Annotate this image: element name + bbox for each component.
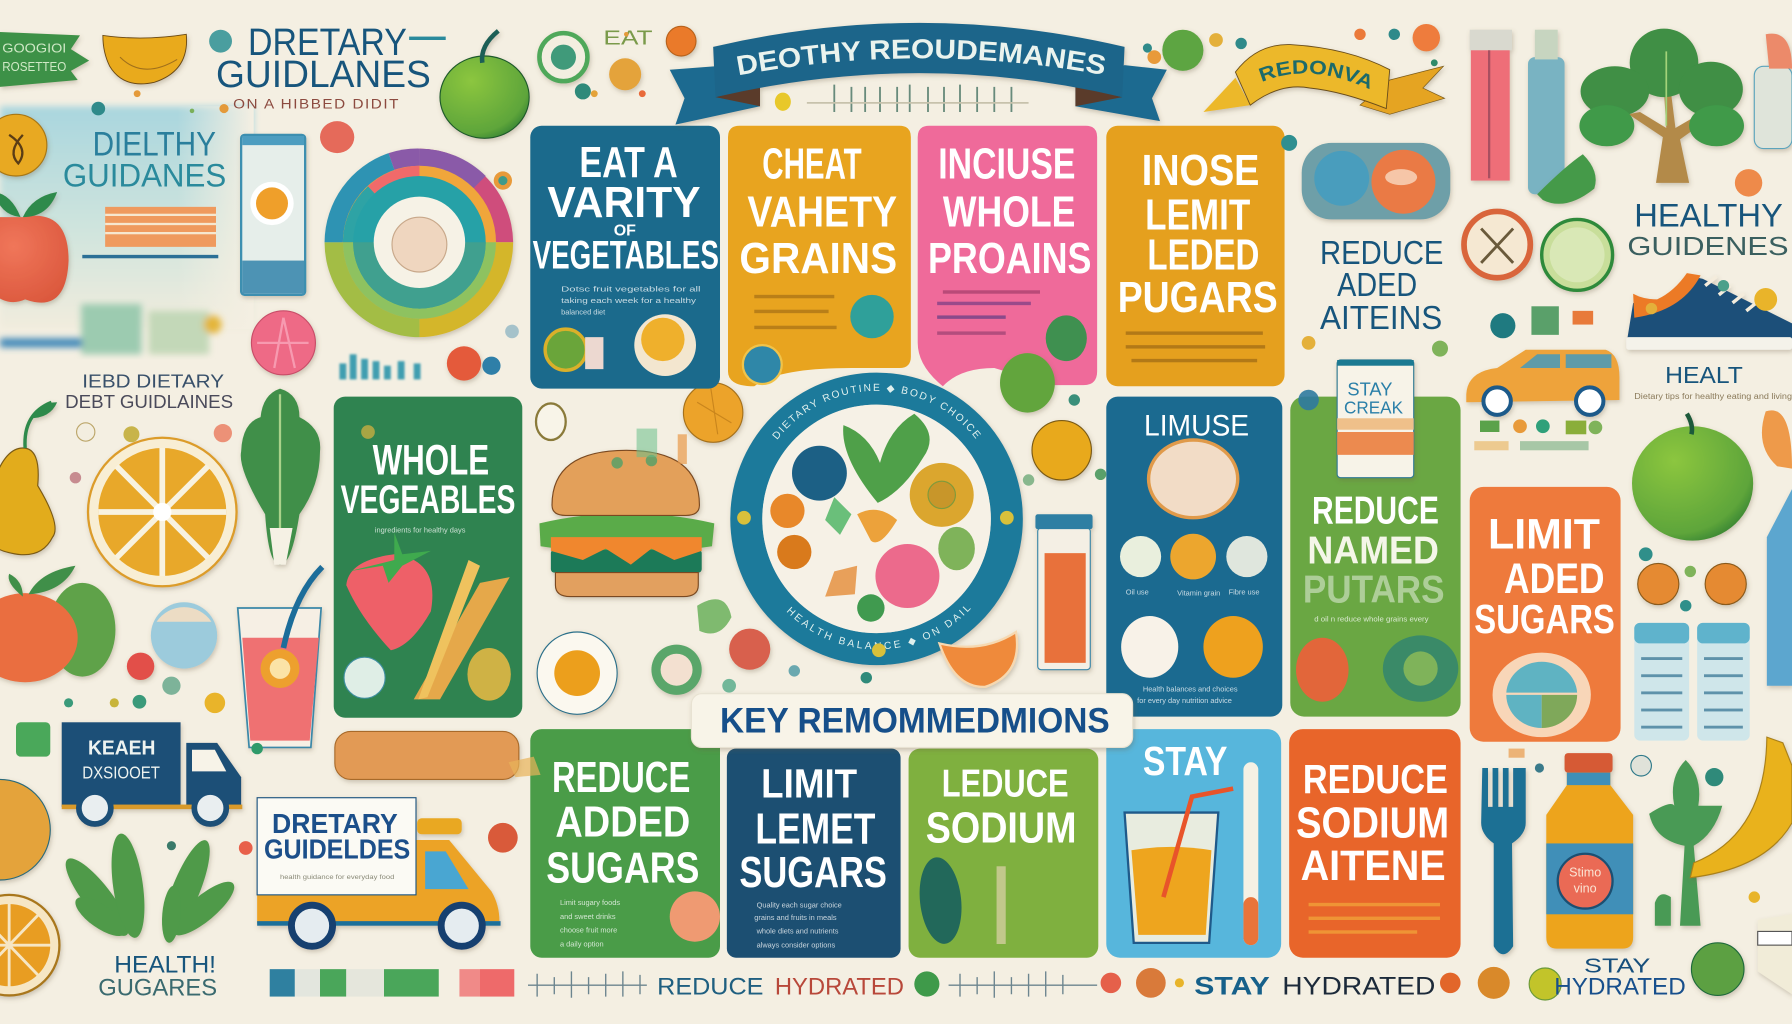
card: reduce added sugars [530,729,720,958]
icon: yellow ball [1032,421,1091,480]
icon: yellow bowl [103,34,187,84]
card body [561,284,701,316]
card heading: WHOLE [373,436,489,483]
icon: red apple [0,192,69,303]
icon: egg [537,632,617,714]
label: key recommendations [691,694,1133,747]
truck text [82,736,160,782]
text: stay hydrated strip: HYDRATED [1282,972,1435,1000]
panel: faded blue dietary guidance [0,106,254,354]
icon: burger [539,450,714,597]
card heading: PROAINS [928,235,1091,283]
card: limit aded sugars [1470,487,1621,742]
icons: card foods [545,329,586,370]
banner: yellow ribbon [1204,44,1446,118]
title: dretary guidlanes: GUIDLANES [216,53,431,95]
icon: fruit [729,629,770,670]
plate: circular recommendations [730,372,1026,670]
text: feed dietary: DEBT GUIDLAINES [65,391,233,412]
icon: fork [1481,768,1526,954]
ribbon text: REDONVA [1258,60,1370,90]
carton: stay creak: STAY [1347,378,1392,399]
icon: red ball [447,346,481,381]
text: reduce aded aiteins: REDUCE [1320,235,1443,272]
icon: jar [1758,914,1792,994]
green ribbon top left: ROSETTEO [2,60,66,74]
card heading: VEGETABLES [533,234,719,278]
text: stay hydrated strip [1194,972,1435,1000]
body: Quality each sugar choice [757,900,842,909]
card: reduce sodium aitene [1289,729,1461,958]
card body [1126,331,1265,362]
icon: banana [1690,737,1792,878]
body: Limit sugary foods [560,898,620,907]
heading: LEMET [755,805,876,853]
chart: orange stripes [82,207,218,258]
icon: green ball top right [1162,30,1203,71]
icon: orange coin [683,383,743,442]
card heading: LIMUSE [1144,409,1249,442]
title: dretary guidlanes: DRETARY [248,21,407,63]
heading: LEDUCE [942,763,1069,806]
heading [1296,756,1449,889]
icons: red dots [1101,968,1184,998]
body: a daily option [560,939,604,948]
icon: leaves [57,832,241,944]
card heading [1474,511,1615,642]
body: choose fruit more [560,926,617,935]
color strip [270,969,514,997]
card heading [739,140,897,283]
text: healthy guidenes: HEALTHY [1634,197,1783,233]
subtitle: ON A HIBBED DIDIT [233,97,400,112]
icon: small orange [609,58,641,90]
icon: ruler [1767,489,1792,686]
card body: Oil use [1126,587,1149,596]
card heading [928,140,1091,283]
text: healthy guidenes [1627,197,1789,261]
card: include whole proains [918,126,1097,413]
body: and sweet drinks [560,912,616,921]
label: key recommendations: KEY REMOMMEDMIONS [720,701,1110,741]
card body [937,290,1040,335]
icon: grapefruit [670,891,720,942]
card body: taking each week for a healthy [561,296,696,305]
text: reduce hydrated strip: REDUCE [657,973,763,1000]
icon: bread [335,731,519,779]
card body [1126,587,1259,705]
text: feed dietary [65,370,233,412]
card body: Fibre use [1229,587,1259,596]
card body: Vitamin grain [1177,588,1220,597]
body: whole diets and nutrients [756,927,839,936]
card heading: PUGARS [1118,274,1278,322]
card body: balanced diet [561,307,605,316]
heading: REDUCE [1303,756,1448,802]
card heading: REDUCE [1312,489,1439,532]
text: stay hydrated right: STAY [1584,955,1651,978]
text: healthy gucares: GUGARES [98,974,217,1001]
blurred bars [0,304,222,354]
icon: pear [0,402,57,555]
icon: egg carton [241,135,305,295]
text: healthy guidenes: GUIDENES [1627,231,1789,261]
body [1309,903,1440,934]
icon: yellow dot [775,93,791,111]
body: grains and fruits in meals [754,913,837,922]
text: reduce aded aiteins: AITEINS [1320,300,1442,337]
card heading [533,139,719,278]
heading: SUGARS [739,849,887,897]
card: whole vegetables: ingredients for healthy days [375,526,466,535]
heading: SODIUM [1296,800,1449,848]
heading [739,761,887,897]
carton: stay creak [1337,360,1414,478]
icons: foods [1120,440,1267,678]
icon: spinach tree [1579,29,1744,183]
card body: Health balances and choices [1143,684,1238,693]
icon: orange wedge [939,632,1017,687]
truck text: GUIDELDES [264,833,410,864]
icon: herb plant [1649,760,1722,926]
text: eat: EAT [603,27,653,50]
icon: orange fruit [1762,410,1792,469]
icon: green apple right [1632,414,1753,541]
card heading [341,436,515,522]
decorative pulse line [528,971,1097,998]
icon: yellow truck [257,798,501,946]
text: healthy gucares: HEALTH! [114,952,216,979]
truck text: KEAEH [88,736,155,759]
card heading: GRAINS [739,235,897,283]
icon: green sprout [697,599,731,633]
card: reduce named putars [1290,397,1461,717]
truck text: health guidance for everyday food [280,874,394,881]
plate foods [770,414,975,622]
card heading [1118,147,1278,322]
card: eat a variety of vegetables [530,126,720,389]
icon: juice glass [1125,789,1233,943]
text: stay hydrated right: HYDRATED [1554,973,1686,1000]
body [754,900,842,949]
icon: orange ring [666,26,696,56]
card heading: LIMIT [1488,511,1600,558]
icon: orange drink tube [1035,514,1093,670]
icon: lime [1542,219,1613,290]
card heading: VAHETY [747,188,897,236]
icon: greens [1537,154,1596,204]
icon: pink candy [251,311,315,375]
heading: dielthy guidanes [63,125,226,193]
icons: green peas [1046,315,1087,361]
card: limuse [1106,397,1282,717]
icon: red blob [320,121,354,153]
icon: red drink glass [238,567,322,747]
icons: end dots [1440,967,1561,1000]
plate rim text: DIETARY ROUTINE ◆ BODY CHOICES [772,384,981,440]
card heading: LEMIT [1145,192,1251,240]
heading: SUGARS [546,844,699,892]
truck text: DXSIOOET [82,762,160,782]
icon: green apple [440,31,529,138]
plate rim text: HEALTH BALANCE ◆ ON DAILY [786,606,971,650]
icon: blue bowl [151,602,217,669]
icons [1296,638,1349,702]
card body: Dotsc fruit vegetables for all [561,284,701,293]
heading [926,763,1077,852]
card heading [1303,489,1445,611]
body: always consider options [757,940,835,949]
icon: small red berry [127,653,154,680]
heading [546,754,699,892]
card: stay hydrated [1106,729,1281,958]
text: reduce hydrated strip [657,973,904,1000]
green ribbon top left [0,32,89,87]
card heading: CHEAT [762,140,862,188]
banner: title ribbon [670,22,1168,127]
icon: thermometer [1243,762,1258,945]
green ribbon top left: GOOGIOI [2,42,66,56]
card: inose limit leded pugars [1106,126,1285,386]
decorative wave line [807,85,1029,112]
icon: shoe [1626,273,1792,350]
icon: orange slice [88,438,237,586]
truck text: DRETARY [272,808,398,839]
heading: AITENE [1301,842,1446,889]
icon: strawberry [346,533,432,650]
heading: SODIUM [926,804,1077,852]
card heading: ADED [1504,555,1605,602]
card: whole vegetables [334,397,522,718]
icon: yellow coin [0,114,47,176]
card heading: LEDED [1147,232,1259,280]
title: dretary guidlanes [209,21,446,95]
icon: white ring [536,403,566,440]
heading: REDUCE [552,754,690,802]
icons [850,295,894,338]
icon: juice bottle: vino [1574,882,1597,896]
icon: green dot [914,971,939,997]
card heading: INOSE [1142,147,1259,195]
text: stay hydrated right [1554,955,1686,1000]
icon: faded stem [997,866,1006,944]
card heading: VARITY [547,179,701,227]
icon: navy truck [62,722,242,824]
icon: apple pair [0,566,115,682]
banner text: DEOTHY REOUDEMANES [736,39,1105,75]
card heading: WHOLE [943,188,1075,236]
chart: donut [325,149,513,337]
truck text [264,808,410,881]
card heading: NAMED [1307,529,1439,572]
icons: small orange coins [1638,563,1746,605]
icon: pie [1493,653,1591,737]
icon: orange coin [0,779,50,880]
heading: dielthy guidanes: DIELTHY [93,125,216,163]
text: healthy gucares [98,952,217,1001]
card: limit lemet sugars [727,749,901,958]
icon: green circle [1691,943,1744,995]
small blurred skyline [339,354,421,379]
card: cheat vahety grains [728,126,911,386]
card body [754,295,837,329]
card heading: PUTARS [1303,568,1445,611]
icon: leaf [241,389,320,565]
text: reduce aded aiteins: ADED [1337,267,1417,304]
icon: pink tube [1470,30,1512,181]
text: healt: HEALT [1665,362,1743,388]
icon: no sign circle [1464,211,1530,278]
heading: ADDED [555,799,690,847]
panel: info cards [1634,623,1750,741]
carton: stay creak: CREAK [1344,398,1404,418]
icon: orange slice [0,895,59,995]
heading: dielthy guidanes: GUIDANES [63,157,226,193]
card heading: OF [614,222,636,239]
icon: car [1466,350,1619,415]
card heading: INCIUSE [938,140,1075,188]
icon: green spiral [651,645,702,695]
icon: juice bottle: Stimo [1569,866,1601,880]
card heading: EAT A [579,139,678,187]
icon: top right jar [1754,34,1792,149]
text: reduce hydrated strip: HYDRATED [775,973,904,1000]
card heading: SUGARS [1474,596,1615,642]
text: feed dietary: IEBD DIETARY [82,370,224,391]
icon: juice bottle [1546,753,1633,949]
card body: d oil n reduce whole grains every [1314,615,1429,624]
icon: blue pill with orange circle [1302,143,1450,219]
body [560,898,620,948]
text: stay hydrated strip: STAY [1194,972,1270,1000]
text: reduce aded aiteins [1320,235,1443,337]
text: healt [1634,362,1792,401]
icon: small ring [1413,24,1440,51]
text: healt: Dietary tips for healthy eating and living [1634,392,1792,401]
card body: for every day nutrition advice [1137,696,1232,705]
icon: blue tube [1528,30,1565,194]
plate rim text [737,384,1014,658]
card: leduce sodium [909,749,1098,958]
icon: green circle top [539,33,587,81]
icon: leaf [916,855,966,946]
heading: STAY [1143,738,1227,784]
icon: breadstick [414,560,510,699]
card heading: VEGEABLES [341,478,515,522]
heading: LIMIT [761,761,857,807]
icons: card bubbles [344,657,385,698]
